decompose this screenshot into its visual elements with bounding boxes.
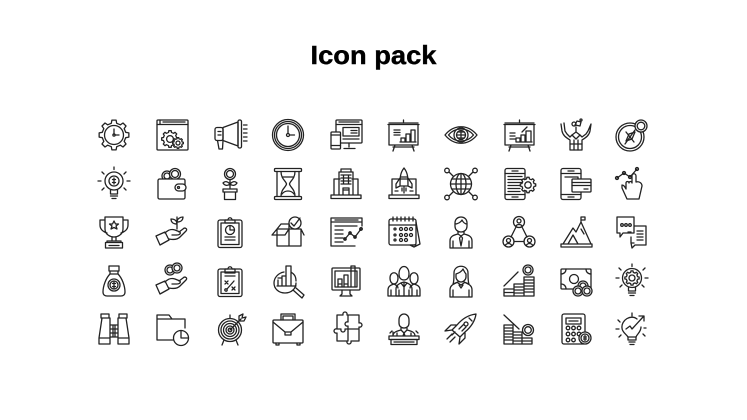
icon: laptop building — [331, 169, 361, 198]
icon: laptop rocket — [389, 168, 419, 198]
icon: hourglass — [274, 168, 302, 200]
icon: globe network — [445, 168, 477, 200]
icon: hand sprout — [156, 217, 187, 245]
icon: mountain flag — [561, 217, 592, 247]
icon: responsive devices — [331, 120, 362, 149]
icon: rocket — [445, 314, 476, 344]
icon: presentation board growth — [388, 120, 419, 151]
icon: clipboard chart — [218, 218, 242, 248]
icon: coins growth — [504, 265, 534, 296]
icon: presentation board data — [504, 120, 535, 151]
icon: eye — [445, 127, 477, 143]
icon: trophy — [100, 217, 128, 248]
icon: browser trend — [331, 218, 362, 246]
icon: hand swipe chart — [616, 168, 642, 199]
icon: browser settings — [157, 120, 188, 150]
icon: wall clock — [272, 120, 304, 150]
icon: chat bubbles — [617, 217, 646, 248]
icon: open box check — [272, 217, 304, 246]
icon: calendar — [389, 217, 420, 247]
icon: speaker at podium — [389, 314, 419, 344]
icon: compass magnifier — [616, 120, 647, 151]
icon: lightbulb growth — [616, 313, 646, 344]
title: Icon pack — [310, 40, 437, 70]
icon: binoculars — [99, 314, 129, 344]
icon: puzzle pieces — [334, 312, 362, 344]
icon: briefcase — [273, 314, 303, 345]
icon: banknote coins — [561, 269, 592, 296]
icon: team network — [503, 216, 535, 247]
icon: calculator coin — [562, 314, 591, 344]
icon: monitor chart — [332, 266, 360, 296]
icon: hands holding box — [561, 119, 591, 150]
icon: wallet coins — [158, 168, 186, 199]
icon: lightbulb gear — [616, 264, 648, 296]
icon: target arrow — [218, 314, 246, 345]
icon: lightbulb coin — [98, 167, 130, 198]
icon: hand coins — [156, 263, 187, 294]
icon: folder pie — [157, 315, 188, 346]
icon: megaphone — [215, 120, 247, 149]
icon: team of people — [388, 266, 420, 296]
icon: clipboard strategy — [218, 267, 242, 296]
icon: money plant — [223, 168, 237, 200]
icon: phone settings — [505, 168, 536, 200]
icon: magnifier chart — [274, 266, 304, 298]
icon: coins decline — [504, 315, 534, 344]
icon: money bag — [103, 266, 125, 296]
icon: businesswoman — [450, 266, 472, 297]
icon: phone card — [561, 168, 591, 200]
icon: gear clock — [99, 120, 129, 150]
icon grid — [98, 119, 648, 346]
icon: businessman — [450, 217, 472, 248]
